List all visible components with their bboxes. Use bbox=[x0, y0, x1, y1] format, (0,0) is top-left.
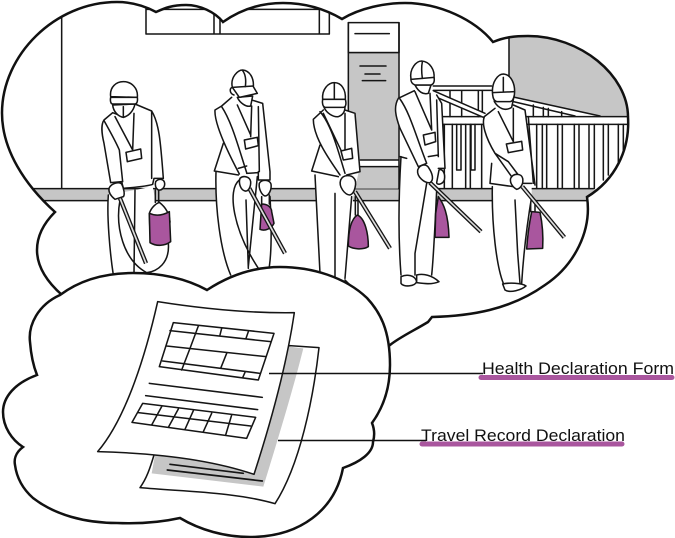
panel: documents cloud bbox=[3, 267, 390, 537]
label: travel record declaration: Travel Record Declaration bbox=[421, 427, 625, 445]
figure: worker 4 bbox=[395, 61, 481, 286]
figure: worker 2 bbox=[214, 70, 285, 275]
icon: health declaration form page bbox=[98, 302, 294, 474]
figure: worker 5 bbox=[483, 74, 564, 291]
icon: travel record declaration page bbox=[140, 346, 319, 504]
figure: worker 3 bbox=[312, 83, 390, 287]
panel: station platform cloud bbox=[2, 0, 635, 345]
figure: worker 1 bbox=[102, 82, 171, 275]
label: health declaration form: Health Declaration Form bbox=[482, 360, 674, 378]
